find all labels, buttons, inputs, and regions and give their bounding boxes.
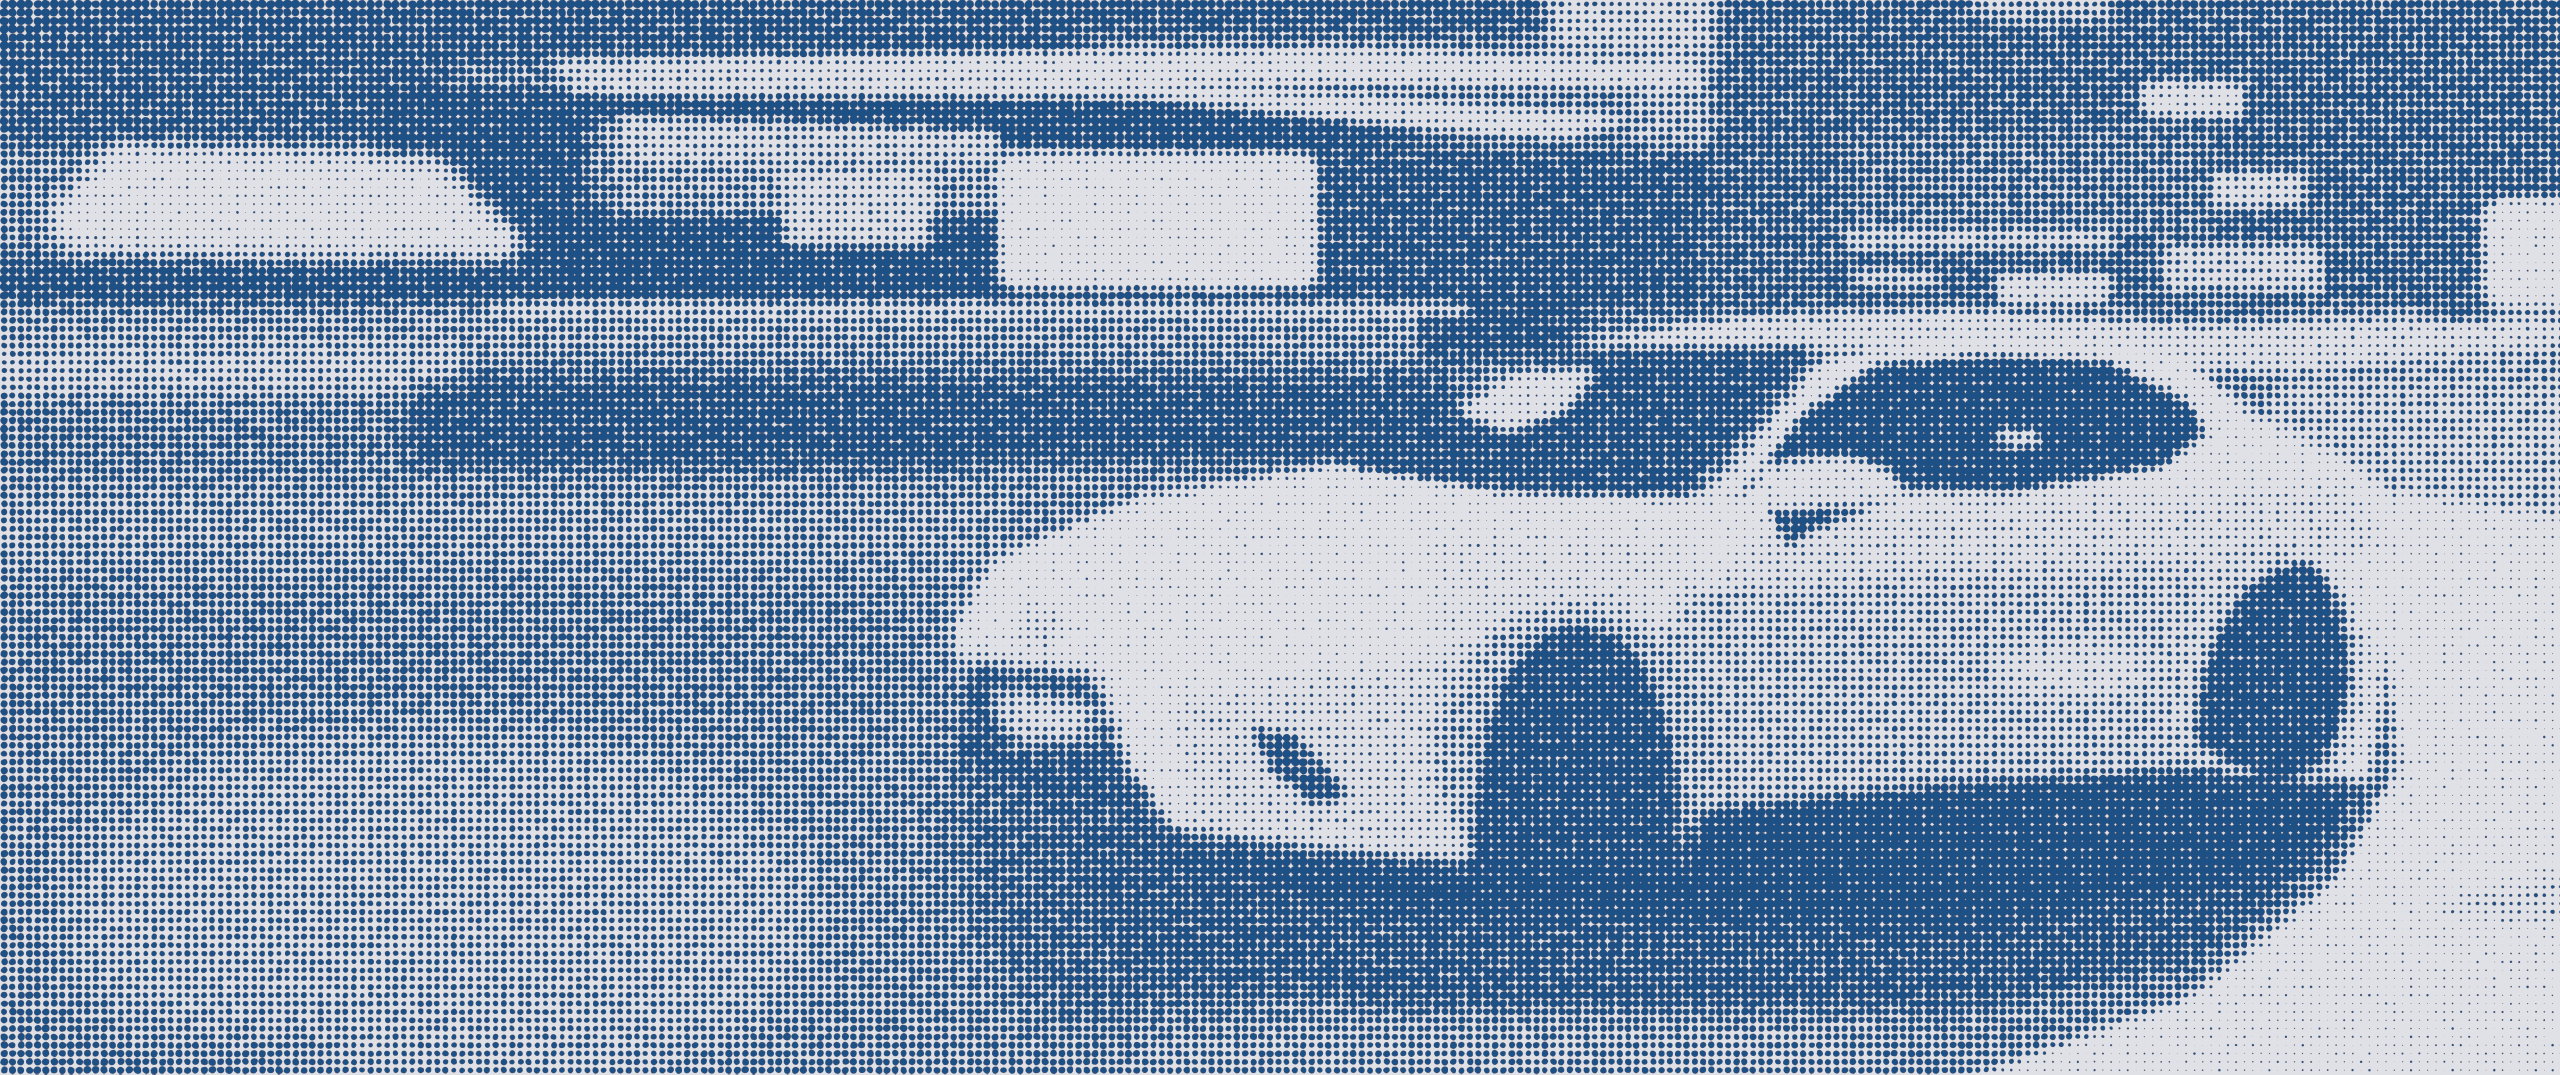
- background street bands: [0, 0, 2560, 531]
- side mirror: [1757, 461, 1894, 506]
- windshield: [1347, 350, 1816, 495]
- side window: [1727, 355, 2207, 510]
- rear wheel: [2196, 564, 2349, 784]
- road surface tones: [0, 490, 2560, 1075]
- background light shapes: [392, 49, 2560, 369]
- left light cloud: [49, 147, 526, 258]
- car body: [955, 335, 2433, 858]
- windshield glare: [1461, 372, 1592, 428]
- front wheel: [1473, 627, 1682, 882]
- grille intake: [1249, 727, 1352, 807]
- white road at right: [1878, 490, 2560, 1075]
- shadow under car: [1061, 768, 2371, 1010]
- front bumper and headlight: [957, 608, 1159, 817]
- car door shading: [1176, 482, 2384, 902]
- car windows: [1347, 350, 2207, 547]
